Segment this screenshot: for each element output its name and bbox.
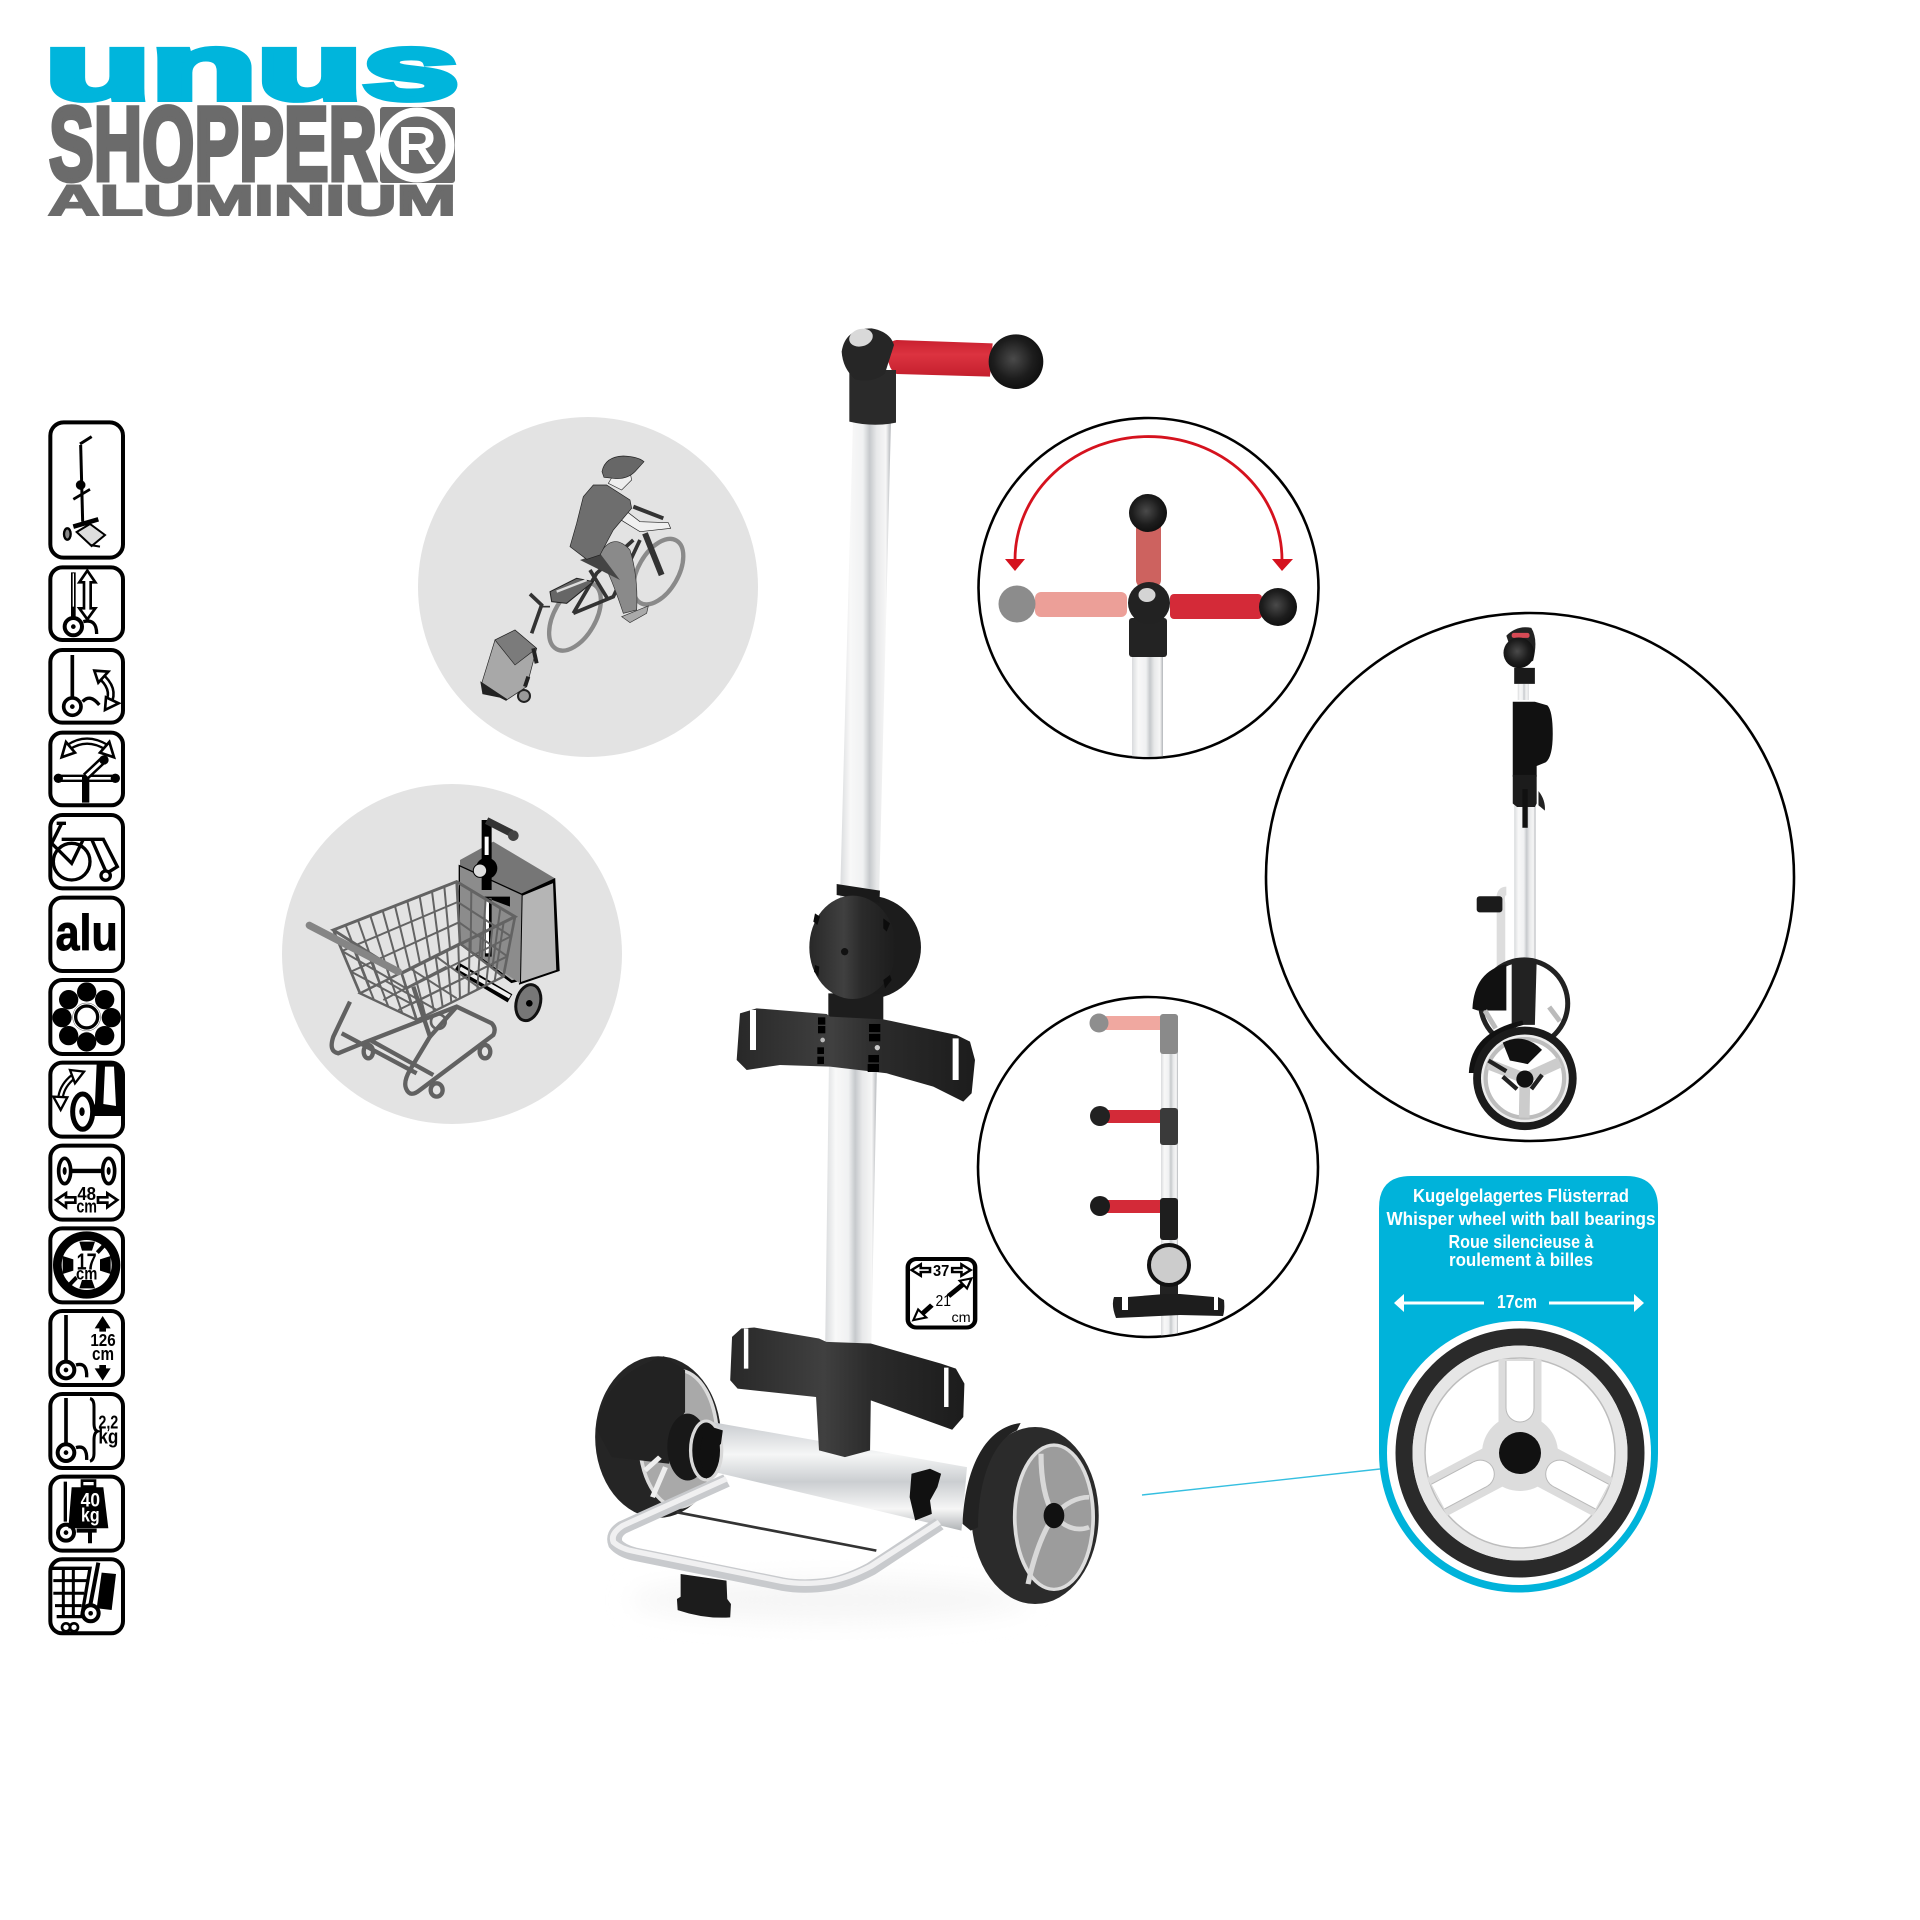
icon: height 126 cm: 126 <box>90 1330 116 1350</box>
logo word: ALUMINIUM: ALUMINIUM <box>48 177 456 225</box>
right axle slot <box>910 1469 941 1521</box>
clasp collar <box>837 884 880 903</box>
logo registered mark <box>380 107 455 183</box>
rim <box>1419 1352 1621 1554</box>
icon: load 40 kg: 40 <box>81 1491 100 1512</box>
footplate rod <box>677 1512 876 1551</box>
icon: track width 48 cm: 48 <box>77 1183 96 1204</box>
illustration: trolley behind shopping cart <box>309 820 558 1097</box>
icon: wheel size 17 cm: cm <box>76 1263 97 1283</box>
trolley bag <box>457 820 558 1023</box>
panel: height settings detail <box>978 997 1318 1337</box>
callout background <box>1379 1176 1658 1592</box>
icon: alu <box>50 898 123 971</box>
shopping cart chassis <box>332 987 495 1097</box>
shopping cart wire basket <box>333 882 515 1020</box>
callout text: roulement à billes <box>1449 1250 1593 1270</box>
icon: wheel size 17 cm <box>50 1228 123 1302</box>
neck <box>828 993 883 1022</box>
middle clasp and upper bracket <box>737 884 975 1102</box>
icon: load 40 kg <box>50 1477 123 1551</box>
icon: track width 48 cm <box>50 1146 123 1220</box>
icon: ball bearing <box>50 980 123 1054</box>
icon: folded dimensions 37 x 21 cm <box>908 1259 975 1328</box>
bracket <box>1113 1294 1224 1318</box>
foot <box>677 1574 731 1618</box>
icon: height 126 cm: cm <box>92 1343 114 1364</box>
cap <box>847 326 875 349</box>
logo: unus Shopper Aluminium <box>45 15 459 225</box>
icon: folded dimensions 37 x 21 cm: 37 <box>933 1263 949 1280</box>
icon: weight 2,2 kg <box>50 1394 123 1468</box>
bracket slots <box>750 1010 959 1080</box>
clasp disc <box>1149 1245 1189 1285</box>
panel: handle rotation detail <box>978 418 1318 758</box>
panel: folded side view <box>1266 613 1794 1141</box>
right handle position <box>1170 588 1297 626</box>
logo word: SHOPPER: SHOPPER <box>49 86 377 203</box>
wheel photo <box>1387 1321 1651 1585</box>
dimension 17cm with arrows: 17cm <box>1497 1292 1537 1312</box>
side view trolley <box>1469 627 1573 1126</box>
icon: telescopic height <box>50 567 123 640</box>
icon: track width 48 cm: cm <box>76 1196 97 1217</box>
icon: rotating handle <box>50 733 123 805</box>
tyre <box>1404 1337 1636 1569</box>
bracket wing <box>737 1008 975 1102</box>
icon: wheel rotation <box>50 1063 123 1137</box>
icon: bike coupling <box>50 815 123 888</box>
shopping cart handle <box>309 925 398 972</box>
icon: shopping cart compatible <box>50 1559 123 1633</box>
chassis and wheels <box>595 1328 1099 1618</box>
icon: alu: alu <box>56 905 118 961</box>
callout text: Roue silencieuse à <box>1448 1232 1594 1252</box>
icon: wheel size 17 cm: 17 <box>77 1248 97 1274</box>
illustration: cyclist towing trolley <box>482 456 694 702</box>
right wheel <box>963 1423 1099 1604</box>
lower bracket with stem <box>730 1328 964 1457</box>
middle position <box>1090 1106 1178 1145</box>
icon: folded dimensions 37 x 21 cm: 21 <box>936 1292 951 1310</box>
logo registered mark: R <box>398 116 436 176</box>
panel: shopping cart use <box>282 784 622 1124</box>
icon: height 126 cm <box>50 1311 123 1385</box>
upright handle position <box>1129 494 1167 588</box>
red arc with arrows <box>1005 437 1293 571</box>
icon: weight 2,2 kg: kg <box>98 1426 118 1448</box>
icon column, middle group <box>50 815 123 1220</box>
panel: bicycle use <box>418 417 758 757</box>
callout connector line <box>1142 1469 1380 1495</box>
low position <box>1090 1196 1178 1240</box>
main tube, upper section <box>840 420 891 900</box>
logo word: unus: unus <box>45 15 459 119</box>
callout: whisper wheel <box>1379 1176 1658 1592</box>
ground shadow <box>630 1578 1030 1622</box>
icon: load 40 kg: kg <box>81 1505 100 1526</box>
icon column, upper group <box>50 422 123 805</box>
handle head <box>842 326 1043 425</box>
main tube, lower section <box>825 1060 877 1360</box>
callout text: Kugelgelagertes Flüsterrad <box>1413 1186 1629 1206</box>
three hollow spokes <box>1437 1359 1603 1497</box>
left handle position <box>998 586 1127 622</box>
icon column, lower group <box>50 1228 123 1633</box>
callout text <box>1386 1186 1656 1270</box>
hub <box>1499 1432 1541 1474</box>
ball end <box>989 334 1043 389</box>
axle tube <box>708 1422 967 1531</box>
left axle collar <box>667 1414 723 1480</box>
tube <box>1132 655 1163 757</box>
main trolley photo <box>595 326 1099 1622</box>
bracket perforations <box>817 1017 880 1072</box>
callout text: Whisper wheel with ball bearings <box>1386 1209 1656 1229</box>
top position, faded <box>1090 1014 1178 1054</box>
icon: weight 2,2 kg: 2,2 <box>98 1411 118 1432</box>
handle joint <box>1128 582 1170 657</box>
red grip <box>887 340 993 377</box>
left wheel <box>595 1356 721 1518</box>
elbow <box>842 328 894 380</box>
dimension 17cm with arrows <box>1394 1292 1644 1312</box>
icon: folded dimensions 37 x 21 cm: cm <box>951 1311 971 1326</box>
icon: tilting foot <box>50 650 123 723</box>
neck below clasp <box>1160 1285 1178 1294</box>
stacked handle positions <box>1090 1014 1224 1336</box>
collar <box>849 370 896 425</box>
clasp front disc <box>809 896 896 999</box>
clasp rear disc <box>816 896 921 999</box>
footplate frame <box>613 1479 939 1586</box>
icon: trolley overview <box>50 422 123 558</box>
